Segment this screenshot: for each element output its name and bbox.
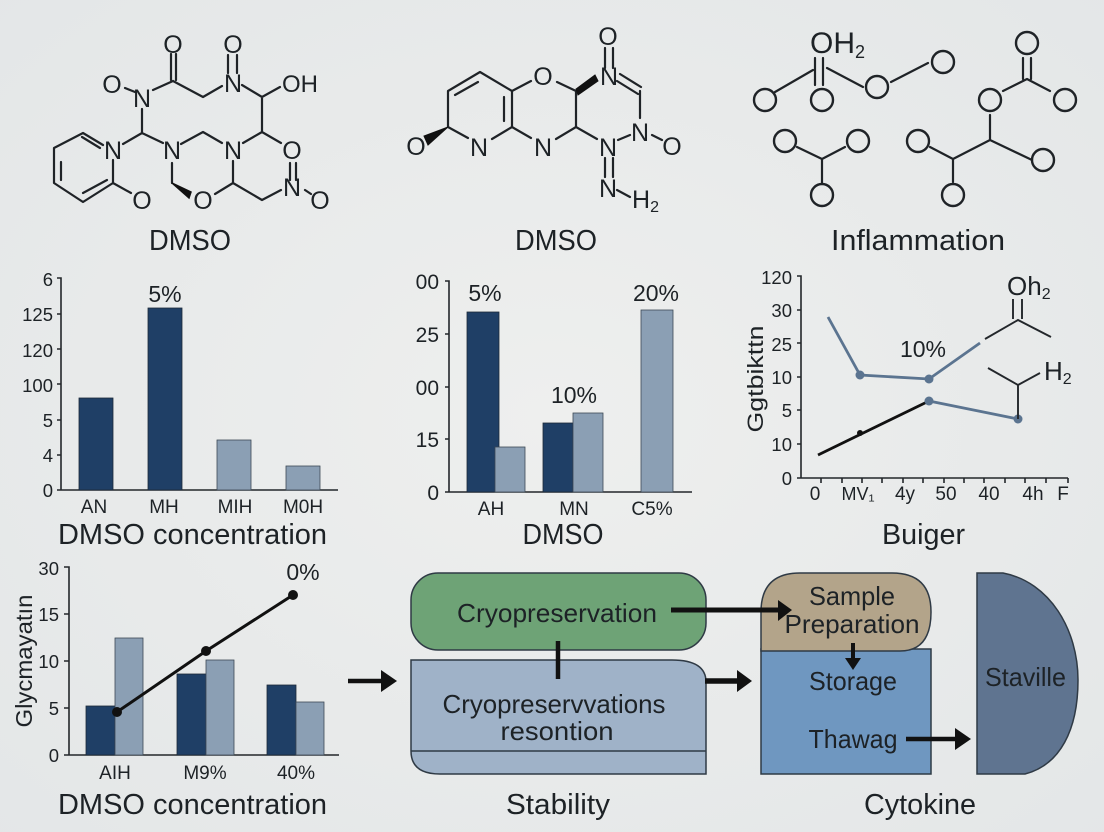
bar chart: center middle: 5% <box>468 280 502 306</box>
line chart: right middle: 2 <box>1042 286 1051 303</box>
molecule: center DMSO: O <box>598 23 618 51</box>
node: Sample Preparation <box>761 573 931 651</box>
combo chart: lower left: 30 <box>38 558 59 579</box>
molecule: left DMSO: O <box>193 187 213 215</box>
bar chart: left middle: MIH <box>218 497 252 518</box>
molecule: center DMSO: H <box>632 186 650 214</box>
caption: DMSO center chart: DMSO <box>522 519 604 551</box>
molecule: center DMSO: 2 <box>650 199 659 216</box>
bar chart: center middle: 15 <box>416 429 439 452</box>
molecule: left DMSO: N <box>163 137 181 165</box>
molecule: left DMSO: N <box>283 174 301 202</box>
molecule: left DMSO: N <box>133 85 151 113</box>
molecule: center DMSO: N <box>600 63 618 91</box>
line chart: right middle: 0 <box>810 484 820 505</box>
combo chart: lower left: 0 <box>49 745 59 766</box>
molecule: center DMSO: O <box>406 133 426 161</box>
caption: DMSO concentration lower: DMSO concentration <box>58 789 327 821</box>
molecule: Inflammation: OH <box>810 27 855 60</box>
line chart: right middle <box>743 267 1072 551</box>
bar chart: center middle: 00 <box>416 377 439 400</box>
bar chart: left middle: 100 <box>22 375 53 396</box>
line chart: right middle: 2 <box>1063 371 1072 388</box>
bar chart: center middle: AH <box>478 499 504 520</box>
molecule: left DMSO: OH <box>282 71 318 98</box>
line chart: right middle: 120 <box>761 267 792 288</box>
bar chart: left middle: 5% <box>148 281 182 307</box>
line chart: right middle: F <box>1057 484 1069 505</box>
molecule: Inflammation: 2 <box>855 42 865 62</box>
line chart: right middle: 25 <box>771 334 792 355</box>
line chart: right middle: 4y <box>895 484 916 505</box>
molecule: left DMSO: O <box>132 187 152 215</box>
molecule: center DMSO: N <box>470 134 488 162</box>
caption: DMSO left: DMSO <box>149 225 231 257</box>
node: Cryopreservation <box>411 573 706 650</box>
bar chart: left middle: MH <box>149 497 179 518</box>
combo chart: lower left: 0% <box>286 559 320 585</box>
molecule: left DMSO: O <box>223 31 243 59</box>
node: Staville: Staville <box>985 662 1066 692</box>
flow diagram: Cryopreservation <box>457 598 657 628</box>
bar chart: left middle <box>22 269 338 551</box>
bar chart: center middle: 0 <box>427 482 439 505</box>
node: Staville <box>977 573 1078 774</box>
caption: Stability: Stability <box>506 789 611 821</box>
arrow: to sample preparation <box>671 600 792 621</box>
flow diagram: resontion <box>500 716 614 746</box>
arrow: into cryopreservation <box>348 670 397 692</box>
molecule: left DMSO: N <box>224 137 242 165</box>
bar chart: left middle: 4 <box>43 445 53 466</box>
bar chart: left middle: 5 <box>43 410 53 431</box>
bar chart: center middle <box>416 271 692 551</box>
bar chart: left middle: M0H <box>283 497 323 518</box>
node: Sample Preparation: Preparation <box>784 609 920 639</box>
line chart: right middle: 40 <box>978 484 1000 505</box>
molecule: left DMSO: O <box>102 71 122 99</box>
bar chart: center middle: 00 <box>416 271 439 294</box>
combo chart: lower left: 10 <box>38 651 59 672</box>
line chart: right middle: 0 <box>782 468 792 489</box>
molecule: center DMSO: N <box>599 175 617 203</box>
molecule: Inflammation <box>754 27 1076 257</box>
combo chart: lower left <box>11 558 339 821</box>
bar chart: left middle: 0 <box>43 480 53 501</box>
node: Sample Preparation: Sample <box>809 581 895 611</box>
node: Storage Thawag: Thawag <box>808 724 898 754</box>
line chart: right middle: 50 <box>935 484 957 505</box>
molecule: center DMSO <box>406 23 682 257</box>
node: Storage Thawag <box>761 649 931 774</box>
molecule: left DMSO: O <box>282 137 302 165</box>
line chart: right middle: Ggtbikttn <box>743 326 768 432</box>
line chart: right middle: 10 <box>771 367 792 388</box>
arrow: thawag to stability <box>906 728 971 750</box>
line chart: right middle: 10 <box>771 434 792 455</box>
connector: green to blue <box>556 641 560 679</box>
bar chart: left middle: AN <box>81 497 107 518</box>
molecule: center DMSO: O <box>533 63 553 91</box>
combo chart: lower left: 5 <box>49 698 59 719</box>
bar chart: left middle: 125 <box>22 304 53 325</box>
molecule: center DMSO: N <box>534 134 552 162</box>
arrow: to storage <box>705 670 752 692</box>
line chart: right middle: 4h <box>1022 484 1044 505</box>
combo chart: lower left: Glycmayatın <box>11 594 37 728</box>
bar chart: center middle: 10% <box>551 382 597 408</box>
caption: Cytokine: Cytokine <box>864 789 976 821</box>
combo chart: lower left: 40% <box>277 763 315 784</box>
combo chart: lower left: AIH <box>99 763 131 784</box>
arrow: to storage inner <box>845 643 861 670</box>
bar chart: center middle: 20% <box>633 280 679 306</box>
combo chart: lower left: 15 <box>38 604 59 625</box>
molecule: left DMSO: O <box>163 31 183 59</box>
molecule: left DMSO: N <box>224 70 242 98</box>
molecule: center DMSO: N <box>599 134 617 162</box>
node: Storage Thawag: Storage <box>809 666 897 696</box>
line chart: right middle: H <box>1044 356 1063 386</box>
flow diagram <box>348 573 1078 821</box>
molecule: left DMSO <box>54 31 330 257</box>
molecule: left DMSO: O <box>310 187 330 215</box>
line chart: right middle: 5 <box>782 400 792 421</box>
caption: Inflammation: Inflammation <box>831 225 1005 257</box>
caption: DMSO concentration: DMSO concentration <box>58 519 327 551</box>
line chart: right middle: MV₁ <box>841 484 875 504</box>
bar chart: center middle: C5% <box>631 499 673 520</box>
line chart: right middle: 30 <box>771 300 792 321</box>
molecule: left DMSO: N <box>104 137 122 165</box>
molecule: center DMSO: N <box>631 119 649 147</box>
bar chart: left middle: 120 <box>22 340 53 361</box>
bar chart: center middle: 25 <box>416 324 439 347</box>
molecule: center DMSO: O <box>662 133 682 161</box>
node: Cryopreservation resontion <box>411 660 706 774</box>
bar chart: left middle: 6 <box>43 269 53 290</box>
flow diagram: Cryopreservvations <box>442 689 666 719</box>
line chart: right middle: 10% <box>900 336 946 362</box>
caption: Buiger: Buiger <box>882 519 965 551</box>
line chart: right middle: Oh <box>1007 271 1042 301</box>
caption: DMSO center: DMSO <box>515 225 597 257</box>
bar chart: center middle: MN <box>559 499 589 520</box>
combo chart: lower left: M9% <box>183 763 227 784</box>
